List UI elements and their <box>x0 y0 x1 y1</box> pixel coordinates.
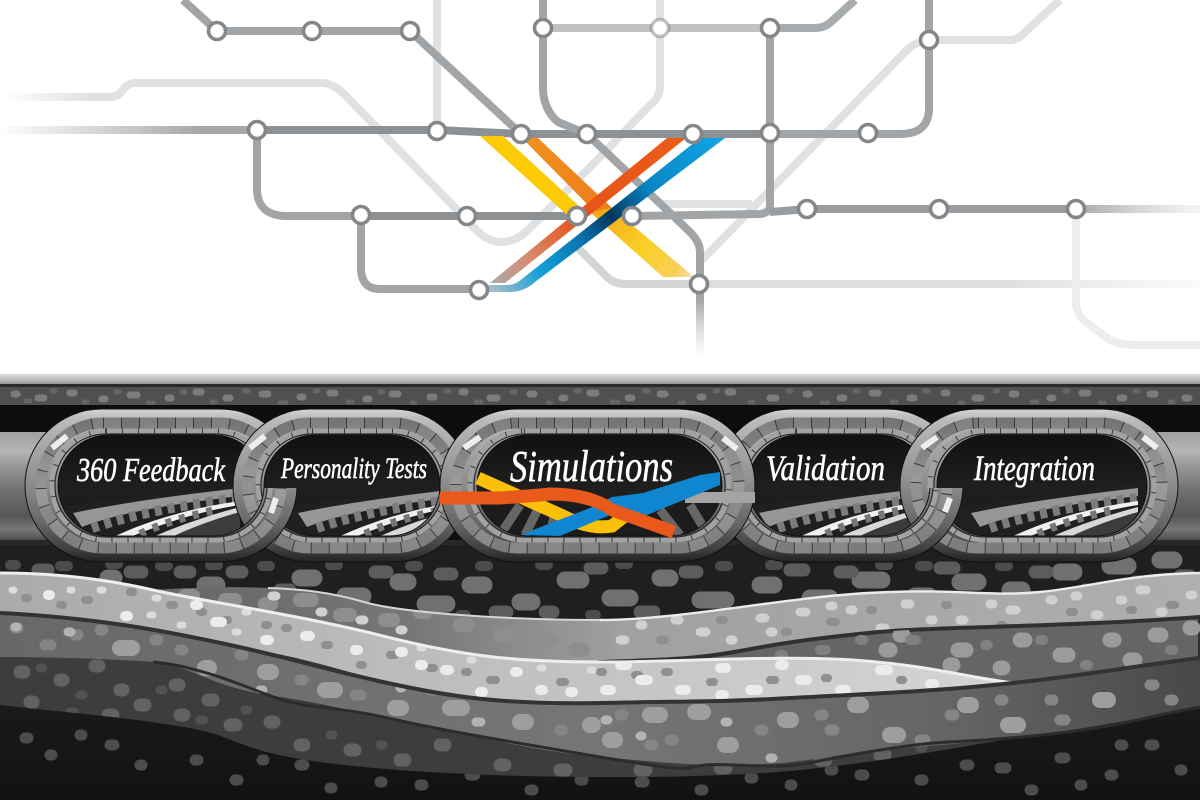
ground layers <box>0 540 1200 800</box>
gray bar right <box>685 492 755 503</box>
tangled track: blue <box>520 472 720 536</box>
track: yellow upper <box>480 136 580 214</box>
track: blue <box>486 138 725 292</box>
chain link: Integration <box>900 409 1178 562</box>
upper right medium layer <box>160 572 1200 660</box>
chain link: 360 Feedback <box>24 410 264 562</box>
central mottled grey layer <box>0 613 1200 768</box>
metro map: coloured crossing tracks <box>480 136 725 292</box>
metro map: stations <box>208 20 1084 298</box>
metro map: faint background lines <box>0 0 1200 345</box>
deep dark base <box>0 540 1200 800</box>
chain link 4 hook over link 5 <box>900 488 964 552</box>
chain link: Personality Tests <box>233 409 470 562</box>
label: Validation: Validation <box>766 448 885 488</box>
bright pale band <box>0 573 1013 703</box>
label: Personality Tests: Personality Tests <box>280 452 427 485</box>
scattered stones in bottom dark layer <box>25 735 1182 790</box>
gravel strip under the surface <box>0 387 1200 406</box>
dark stony layer <box>0 654 1001 778</box>
track: orange upper <box>522 138 612 214</box>
tunnel tube: left <box>0 432 60 540</box>
white map background <box>0 0 1200 380</box>
ground surface cap <box>0 374 1200 387</box>
dark cavity behind the chain <box>0 405 1200 555</box>
chain link 1 hook over link 2 <box>232 488 298 548</box>
label: 360 Feedback: 360 Feedback <box>76 452 226 489</box>
tangled track: orange <box>440 494 674 532</box>
track: yellow lower <box>590 208 694 277</box>
lower right stone layer under dark seam <box>598 615 1200 682</box>
chain link: Validation <box>736 410 931 562</box>
tunnel tube: right <box>1140 432 1200 540</box>
metro map: main grey lines <box>0 0 1200 358</box>
label: Simulations: Simulations <box>510 442 673 491</box>
cobble band under chain <box>0 545 1200 625</box>
tangled track: yellow <box>478 478 626 527</box>
chain link: Simulations with tangled tracks <box>440 409 755 562</box>
label: Integration: Integration <box>973 448 1095 488</box>
track: red orange <box>490 138 686 283</box>
